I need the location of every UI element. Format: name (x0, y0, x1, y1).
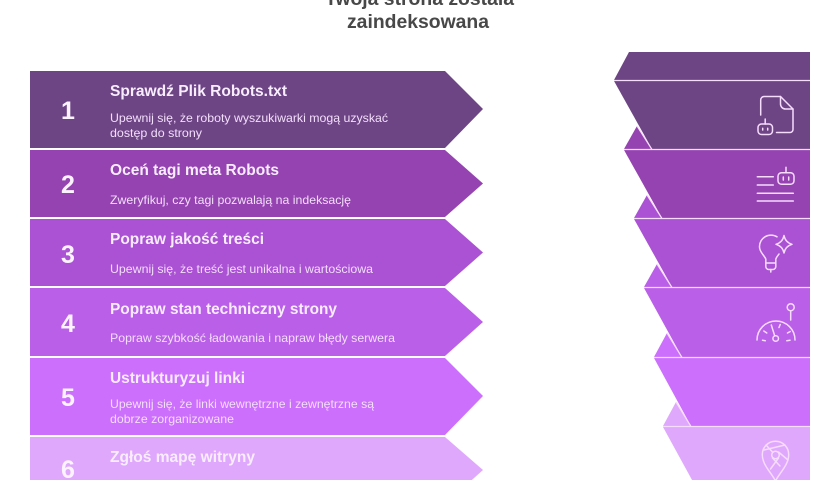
ribbon segment 1 (614, 81, 810, 149)
panel: left step list (30, 71, 483, 480)
ribbon segment 5 (654, 358, 810, 426)
step 6: Zgłoś mapę witryny (110, 449, 255, 466)
step 3: Popraw jakość treści (110, 231, 264, 248)
step 1: 1 (61, 97, 75, 125)
ribbon segment 4 (644, 288, 810, 357)
step 3: 3 (61, 241, 75, 269)
step 4: Popraw szybkość ładowania i napraw błędy serwera (110, 331, 395, 345)
step 5: Upewnij się, że linki wewnętrzne i zewnętrzne są (110, 397, 374, 411)
step 2: Oceń tagi meta Robots (110, 162, 279, 179)
step 4: Popraw stan techniczny strony (110, 301, 337, 318)
ribbon segment 6 (663, 427, 810, 480)
icon: robots file (758, 96, 793, 134)
fold triangle 3 (634, 195, 662, 218)
icon: robot with text lines (757, 167, 794, 201)
fold triangle 2 (624, 126, 652, 149)
icon: light bulb with sparkle (759, 235, 792, 272)
step 4 (30, 288, 483, 356)
step 6 (30, 437, 483, 480)
panel: right folded ribbon (614, 52, 810, 480)
ribbon segment 3 (634, 219, 810, 287)
step 5: Ustrukturyzuj linki (110, 370, 245, 387)
step 2: 2 (61, 171, 75, 199)
fold triangle 4 (644, 264, 672, 287)
step 1: Sprawdź Plik Robots.txt (110, 83, 288, 100)
title (325, 0, 514, 33)
ribbon segment 2 (624, 150, 810, 218)
title: zaindeksowana (347, 12, 489, 33)
step 1: dostęp do strony (110, 126, 202, 140)
step 2 (30, 150, 483, 217)
fold triangle 6 (663, 402, 691, 426)
icon: speed gauge (757, 304, 795, 341)
step 5: dobrze zorganizowane (110, 412, 234, 426)
step 2: Zweryfikuj, czy tagi pozwalają na indeksację (110, 193, 351, 207)
icon: map pin (762, 441, 789, 480)
step 5 (30, 358, 483, 435)
step 3: Upewnij się, że treść jest unikalna i wartościowa (110, 262, 373, 276)
step 3 (30, 219, 483, 286)
step 1: Upewnij się, że roboty wyszukiwarki mogą uzyskać (110, 111, 388, 125)
step 4: 4 (61, 310, 75, 338)
step 1 (30, 71, 483, 148)
step 5: 5 (61, 384, 75, 412)
ribbon top flap (614, 52, 810, 80)
fold triangle 5 (654, 333, 682, 357)
